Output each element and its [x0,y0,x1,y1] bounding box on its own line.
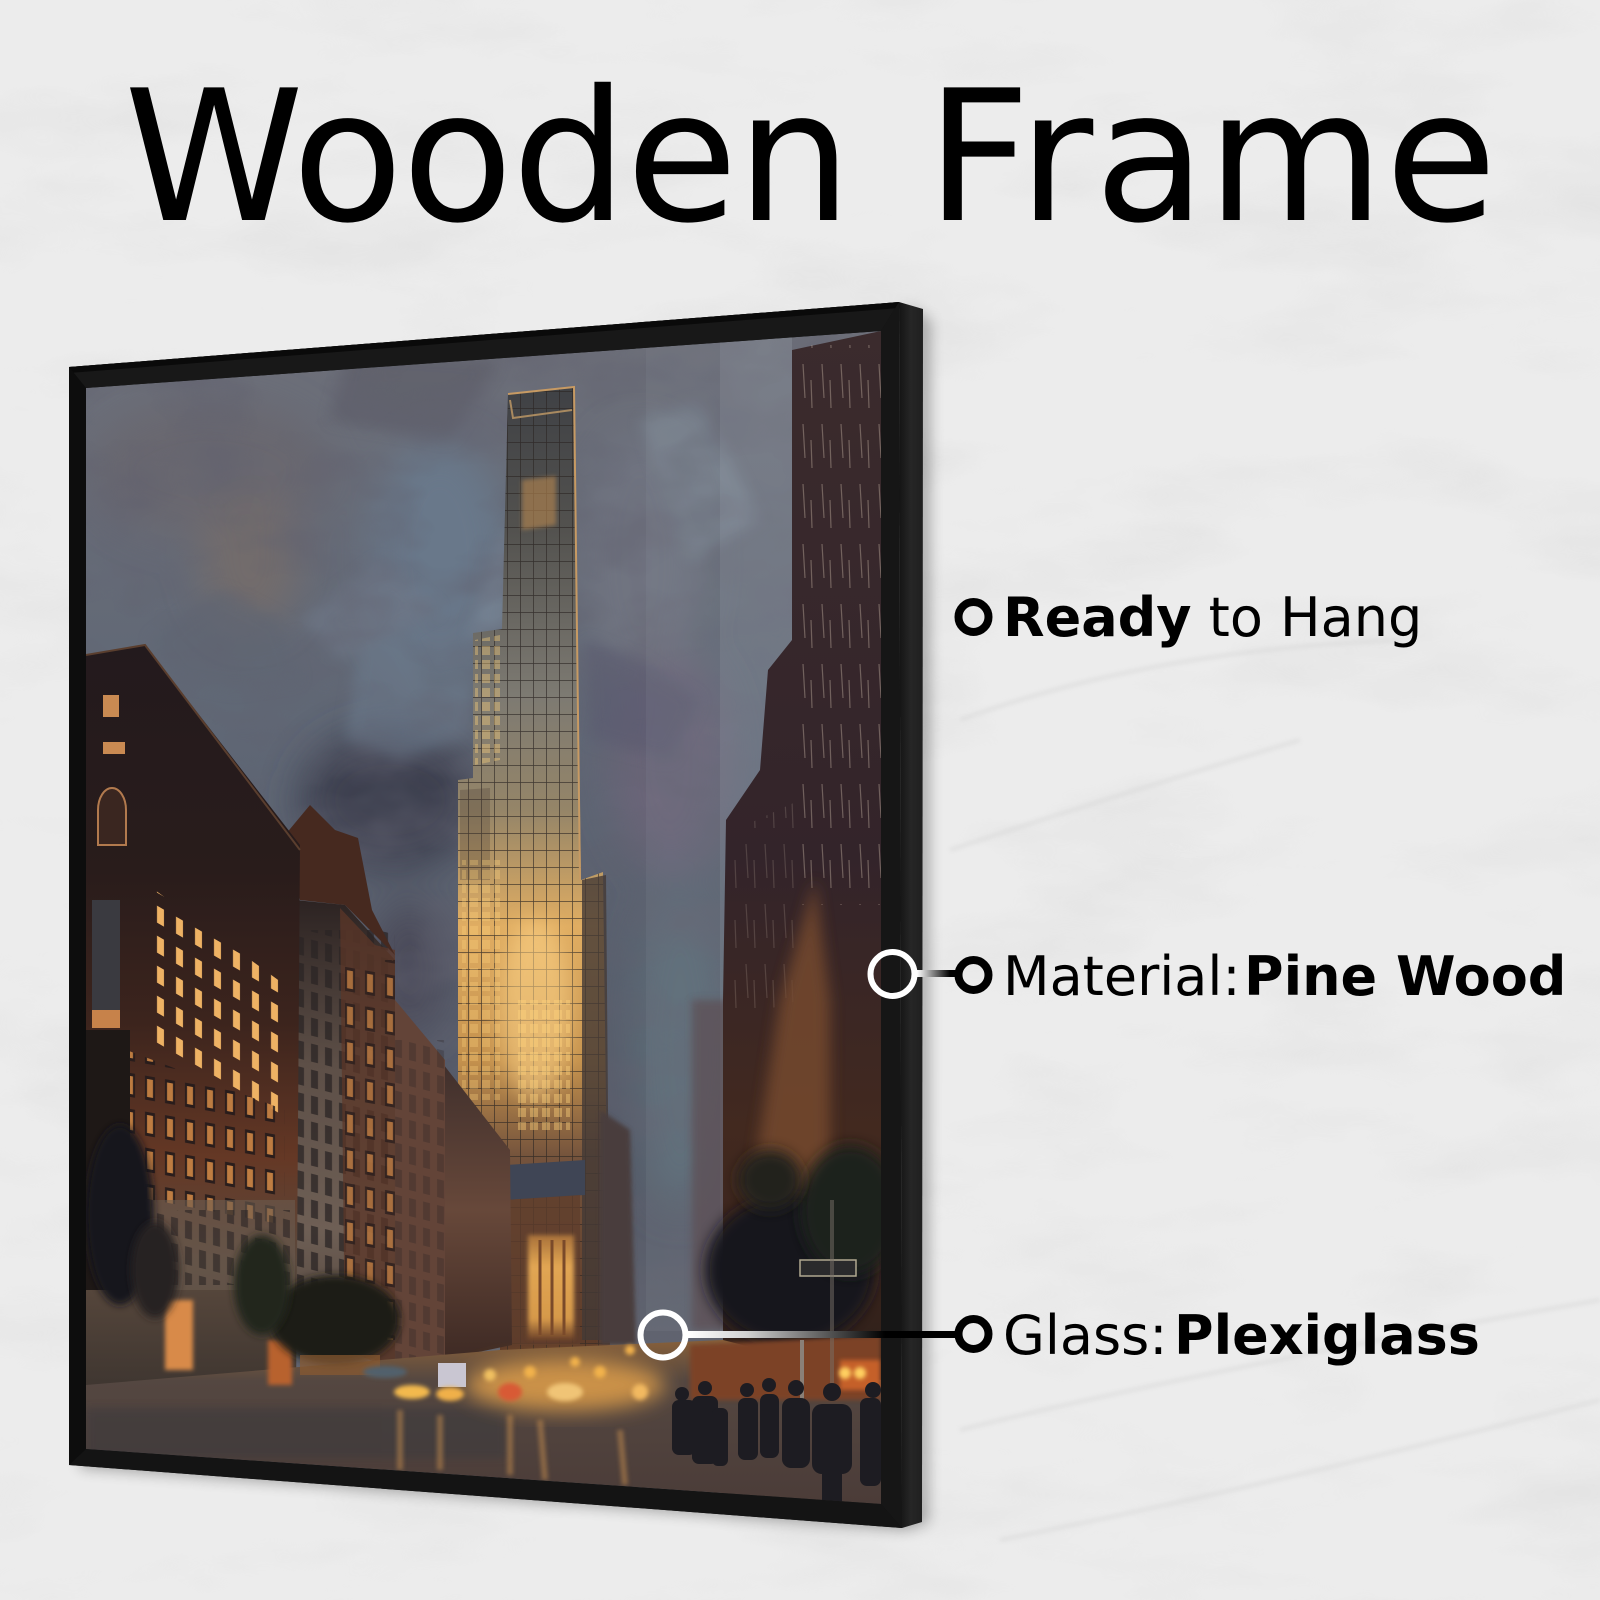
leader line [688,1331,958,1338]
pedestrians [672,1378,881,1502]
white ring [870,952,914,996]
label: Glass: [1003,1304,1167,1367]
marker [958,602,988,632]
label: Pine Wood [1244,945,1566,1008]
tall tower [458,387,636,1350]
frame shadow [80,305,930,1530]
title: Wooden [124,51,850,263]
callout: Ready to Hang [958,586,1422,649]
sky [86,331,881,1504]
street [86,1340,881,1504]
left buildings, far to near [86,645,512,1400]
leader line [917,970,957,977]
painting [86,331,900,1504]
white ring [640,1312,686,1358]
label: Material: [1003,945,1241,1008]
framed artwork [69,302,923,1528]
title: Frame [926,51,1498,263]
callout: Glass [640,1304,1480,1367]
reflection bands [720,338,792,1331]
frame inner bevel [69,302,899,388]
callout: Material [870,945,1566,1008]
right dark buildings [692,331,881,1504]
frame side [899,302,923,1528]
marker [958,1319,988,1349]
traffic lights [363,1345,866,1401]
frame front [69,302,902,1528]
street level: trees and storefronts [86,1125,900,1430]
label: Ready to Hang [1003,586,1422,649]
marker [958,960,988,990]
label: Plexiglass [1174,1304,1480,1367]
